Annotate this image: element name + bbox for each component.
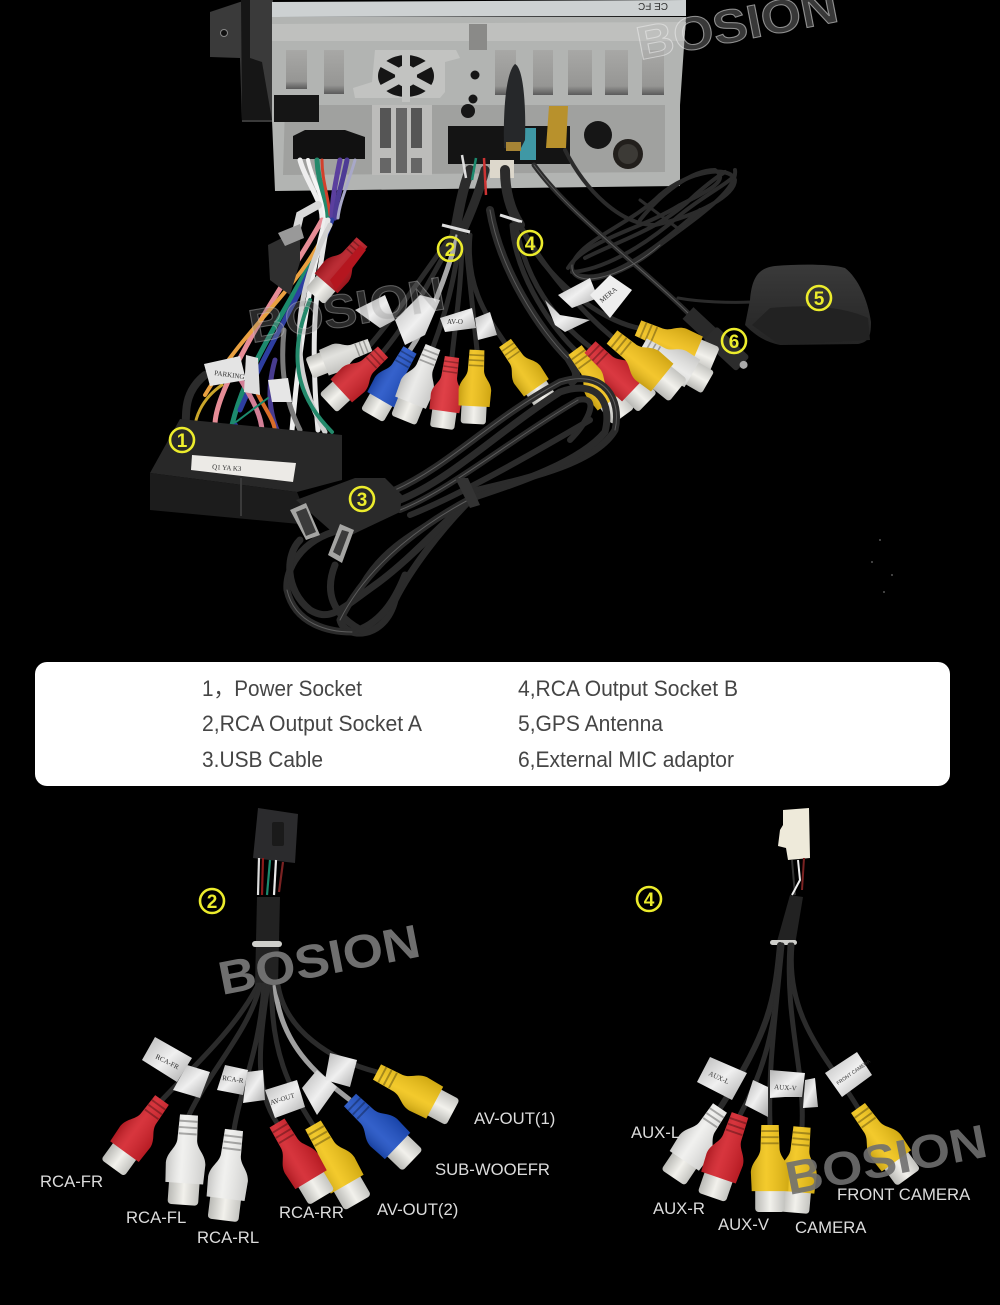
label AUX-V: AUX-V (718, 1215, 770, 1234)
cable tie (770, 940, 797, 945)
badge 1 (170, 428, 194, 452)
RCA socket B detail (658, 808, 924, 1214)
label RCA-FL: RCA-FL (126, 1208, 186, 1227)
power socket (150, 419, 342, 525)
legend item 5: 5,GPS Antenna (518, 711, 664, 736)
socket B labels (631, 1123, 971, 1237)
cables behind: MIC and GPS coil (534, 150, 752, 315)
label SUB-WOOEFR: SUB-WOOEFR (435, 1160, 550, 1179)
badge 6 (722, 329, 746, 353)
RCA socket B tags (545, 275, 632, 332)
badge 2 (438, 237, 462, 261)
RCA socket A tags: AV-O (447, 318, 463, 326)
watermark: socket B: BOSION (781, 1114, 991, 1205)
legend item 3: 3.USB Cable (202, 747, 323, 772)
FCC marks: CE FC (638, 0, 668, 11)
USB plugs (290, 478, 402, 563)
ventilation slots (286, 50, 664, 95)
rear case (272, 17, 686, 191)
white multi-pin connector (778, 808, 810, 860)
white sub plug (490, 160, 514, 178)
silver cable tags: AUX-L (707, 1070, 730, 1086)
power wire harness (185, 160, 355, 452)
label RCA-RR: RCA-RR (279, 1203, 344, 1222)
USB plug and RCA near power harness (268, 224, 374, 307)
RCA socket A connectors (304, 332, 559, 431)
sleeved cable trunk (776, 895, 803, 945)
label AV-OUT(1): AV-OUT(1) (474, 1109, 555, 1128)
black connector block (448, 126, 570, 164)
wire tags on power harness (204, 355, 292, 402)
label AUX-R: AUX-R (653, 1199, 705, 1218)
GPS antenna (745, 265, 871, 345)
fakra (520, 128, 536, 160)
RCA socket B connectors (560, 311, 722, 427)
socket A labels (40, 1109, 555, 1247)
legend panel (35, 662, 950, 786)
fan vent (353, 50, 460, 102)
lower recess (283, 105, 665, 175)
wire tags on power harness: PARKING (214, 369, 245, 381)
fan-out cables (162, 985, 377, 1130)
legend item 2: 2,RCA Output Socket A (202, 711, 422, 736)
RCA output socket A wires (370, 155, 505, 357)
connectors (658, 1098, 735, 1188)
head unit rear panel (210, 0, 686, 191)
RCA socket A tags (355, 295, 497, 345)
label FRONT CAMERA: FRONT CAMERA (837, 1185, 971, 1204)
legend item 6: 6,External MIC adaptor (518, 747, 734, 772)
coloured wires (258, 858, 283, 895)
RCA socket A detail (98, 808, 462, 1223)
badge 5: 5 (814, 289, 825, 310)
silver cable tags: RCA-R (222, 1074, 244, 1085)
stubby antenna (504, 64, 525, 150)
gold SMA (546, 106, 568, 148)
fan-out cables (720, 945, 858, 1127)
RCA socket B tags: MERA (598, 285, 619, 305)
badge 1: 1 (177, 431, 188, 452)
badge 3: 3 (357, 490, 367, 511)
badge 3 (350, 487, 374, 511)
silver cable tags: FRONT CAMERA (836, 1058, 872, 1087)
badge 5 (807, 286, 831, 310)
silver cable tags: AV-OUT (269, 1091, 296, 1107)
label AV-OUT(2): AV-OUT(2) (377, 1200, 458, 1219)
socket B number badge (637, 887, 661, 911)
badge 4 (518, 231, 542, 255)
socket A number badge (200, 889, 224, 913)
speckle artefact (871, 539, 893, 593)
connectors (98, 1089, 177, 1179)
grille (372, 105, 432, 175)
label RCA-FR: RCA-FR (40, 1172, 103, 1191)
RCA output socket B wires (490, 170, 638, 382)
power socket: Q1 YA K3 (212, 463, 242, 473)
badge 2: 2 (445, 240, 455, 261)
MIC adaptor (681, 306, 753, 375)
top cover (272, 0, 686, 17)
legend item 4: 4,RCA Output Socket B (518, 676, 738, 701)
sleeved cable trunk (255, 897, 280, 985)
silver cable tags (142, 1037, 357, 1118)
watermark: socket A: BOSION (214, 914, 424, 1005)
silver cable tags: AUX-V (774, 1083, 797, 1093)
silver cable tags: RCA-FR (154, 1053, 181, 1071)
mounting bracket (210, 0, 273, 122)
coloured wires (792, 858, 804, 895)
label AUX-L: AUX-L (631, 1123, 680, 1142)
USB cable coil (287, 379, 617, 633)
black multi-pin connector (253, 808, 298, 863)
silver cable tags (697, 1052, 872, 1117)
label RCA-RL: RCA-RL (197, 1228, 259, 1247)
number badges, main photo (170, 231, 831, 511)
socket B number badge: 4 (644, 890, 655, 911)
socket A number badge: 2 (207, 892, 217, 913)
AV ports (584, 121, 612, 149)
badge 6: 6 (729, 332, 739, 353)
watermark: centre: BOSION (245, 266, 449, 353)
left ISO connector (293, 130, 365, 159)
badge 4: 4 (525, 234, 536, 255)
legend item 1: 1，Power Socket (202, 676, 362, 701)
case screw (469, 24, 487, 50)
cable tie (252, 941, 282, 947)
label CAMERA: CAMERA (795, 1218, 867, 1237)
